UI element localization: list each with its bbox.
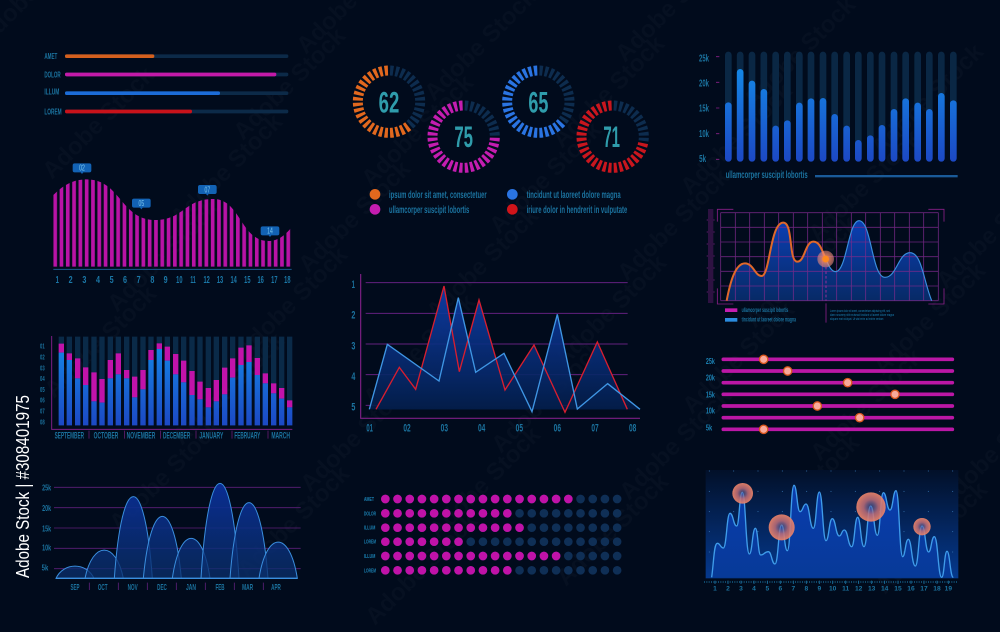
x axis: 5 (110, 275, 114, 286)
chart legend: ullamcorper suscipit lobortis (742, 308, 789, 314)
bar tracks (728, 55, 953, 158)
y axis labels: 3 (351, 340, 355, 352)
stock watermark: Adobe Stock (423, 421, 546, 544)
row labels: ILLUM (364, 554, 376, 560)
grid (721, 213, 938, 301)
y axis labels: 20k (706, 374, 715, 383)
month labels: DECEMBER (163, 430, 191, 440)
stock watermark: Adobe Stock (360, 507, 483, 630)
x axis: 10 (176, 275, 183, 286)
chart legend (725, 308, 796, 323)
x axis labels: 02 (403, 422, 411, 434)
y axis labels: 04 (40, 374, 45, 383)
panel: crossing line chart (351, 274, 640, 434)
callout: 07: 07 (204, 185, 211, 194)
y axis labels: 4 (351, 371, 356, 383)
stock watermark: Adobe Stock (866, 38, 989, 161)
gauge: 75 magenta: 75 (454, 121, 473, 154)
x axis: 2 (69, 275, 73, 286)
legend: ullamcorper suscipit lobortis (389, 205, 470, 216)
row labels: LOREM (364, 540, 376, 546)
row labels: AMET (364, 497, 374, 503)
callout: 05 (132, 199, 151, 209)
y axis labels: 5k (706, 423, 713, 432)
y axis labels: 25k (42, 483, 51, 493)
month labels: MAR (242, 582, 254, 592)
y axis labels: 07 (40, 407, 45, 416)
x axis labels: 9 (817, 586, 821, 593)
progress bar: lorem (44, 107, 288, 117)
panel: overlapping arc chart (42, 483, 301, 592)
progress bar: lorem: LOREM (44, 107, 62, 117)
chart background (706, 470, 958, 578)
x axis labels: 15 (894, 586, 902, 593)
stock watermark: Adobe Stock (551, 468, 674, 591)
axes (361, 274, 640, 418)
month labels: APR (271, 582, 281, 592)
note text: Lorem ipsum dolor sit amet, consectetuer adipiscing elit, sed (830, 309, 890, 313)
orange curve (727, 223, 826, 301)
x axis: 6 (123, 275, 127, 286)
callout: 07 (198, 185, 217, 196)
progress bar: dolor: DOLOR (44, 70, 61, 80)
y axis labels: 20k (699, 79, 709, 90)
stock watermark: Adobe Stock (677, 296, 800, 419)
x axis: 17 (271, 275, 278, 286)
callout: 05: 05 (138, 199, 145, 208)
bar tracks (59, 337, 292, 425)
row labels: ILLUM (364, 526, 376, 532)
filled dots (385, 499, 569, 570)
filled areas (369, 286, 640, 412)
month labels (55, 430, 290, 440)
legend: iriure dolor in hendrerit in vulputate (527, 205, 628, 216)
callout: 14: 14 (267, 227, 273, 236)
x axis labels: 3 (739, 586, 743, 593)
x axis: 14 (230, 275, 237, 286)
panel: progress bars (44, 51, 288, 117)
arcs (56, 483, 297, 578)
y axis labels: 15k (42, 523, 51, 533)
gauge: 62 orange (357, 69, 421, 134)
month labels: NOVEMBER (127, 430, 156, 440)
month labels: JAN (186, 582, 196, 592)
stock watermark: Adobe Stock (868, 257, 991, 380)
panel: slider chart (706, 355, 952, 433)
x axis labels: 04 (478, 422, 486, 434)
x axis labels: 13 (868, 586, 876, 593)
empty dots (385, 499, 617, 570)
stock watermark: Adobe Stock (742, 429, 865, 552)
legend (370, 189, 628, 216)
stock watermark: Adobe Stock (232, 460, 355, 583)
stock watermark: Adobe Stock (358, 288, 481, 411)
panel: grid area chart (707, 209, 944, 323)
stock watermark: Adobe Stock (230, 241, 353, 364)
y axis labels: 5k (699, 154, 706, 165)
callout: 02 (73, 163, 91, 174)
stock watermark: Adobe Stock (293, 155, 416, 278)
vertical stock id text: Adobe Stock | #308401975 (13, 395, 33, 578)
x axis labels: 4 (752, 586, 756, 593)
x axis labels: 08 (629, 422, 636, 434)
x axis labels: 06 (554, 422, 561, 434)
callout: 14 (261, 226, 279, 237)
panel: magenta striped area chart (53, 163, 292, 286)
slider handles (759, 355, 899, 433)
x axis labels: 03 (441, 422, 448, 434)
stock watermark: Adobe Stock (740, 210, 863, 333)
y axis labels (40, 342, 45, 426)
x axis labels: 17 (920, 586, 928, 593)
panel: stacked bar chart (40, 336, 292, 440)
x axis labels: 5 (765, 586, 769, 593)
x axis labels: 2 (726, 586, 730, 593)
x axis: 7 (137, 275, 141, 286)
progress bar: amet (44, 51, 288, 61)
gauge: 71 red (580, 104, 645, 169)
stock watermark: Adobe Stock (486, 335, 609, 458)
x axis labels (366, 422, 636, 434)
month labels: OCTOBER (94, 430, 119, 440)
progress bar: illum: ILLUM (44, 87, 59, 97)
month labels (70, 582, 281, 592)
x axis labels: 01 (366, 422, 373, 434)
stock watermark: Adobe Stock (37, 61, 160, 184)
stock watermark: Adobe Stock (421, 202, 544, 325)
gauge: 62 orange: 62 (379, 86, 399, 119)
y axis labels: 25k (706, 357, 715, 366)
stock watermark: Adobe Stock (102, 194, 225, 317)
y axis labels: 10k (706, 407, 715, 416)
x axis labels: 18 (933, 586, 941, 593)
stock watermark: Adobe Stock (675, 77, 798, 200)
x axis: 1 (56, 275, 59, 286)
stock watermark: Adobe Stock (165, 108, 288, 231)
bar values (728, 72, 953, 158)
x axis ruler (704, 581, 958, 584)
y axis labels: 03 (40, 363, 45, 372)
y axis labels: 01 (40, 342, 45, 351)
marker (817, 251, 834, 301)
panel: rounded bar chart (699, 53, 958, 181)
callout: 02: 02 (79, 164, 85, 173)
background dots (709, 471, 957, 552)
gauge: 71 red: 71 (603, 121, 620, 154)
x axis labels: 10 (829, 586, 837, 593)
y axis labels (706, 357, 715, 432)
grid lines (366, 283, 628, 405)
y axis labels (351, 279, 356, 414)
y axis labels: 1 (352, 279, 355, 291)
axes (52, 336, 292, 429)
area fill (727, 221, 932, 301)
x axis: 9 (164, 275, 168, 286)
note text: aliquam erat volutpat. Ut wisi enim ad minim veniam (830, 317, 883, 321)
month labels: NOV (128, 582, 138, 592)
month labels: DEC (157, 582, 167, 592)
slider tracks (723, 359, 952, 429)
panel: dot matrix (364, 497, 617, 574)
x axis: 3 (82, 275, 87, 286)
y axis labels: 02 (40, 352, 45, 361)
month labels: SEPTEMBER (55, 430, 84, 440)
striped area (53, 179, 292, 267)
stock watermark: Adobe Stock (104, 413, 227, 536)
panel: wave chart with highlights (704, 470, 958, 593)
caption and rule: ullamcorper suscipit lobortis (726, 170, 808, 181)
y axis labels: 25k (699, 53, 709, 64)
x axis: 4 (96, 275, 100, 286)
x axis: 11 (190, 275, 196, 286)
row labels: DOLOR (364, 511, 376, 517)
progress bar: amet: AMET (44, 51, 57, 61)
y axis labels: 15k (706, 390, 715, 399)
month labels: FEB (215, 582, 224, 592)
y axis labels (699, 53, 719, 165)
x axis labels: 07 (591, 422, 599, 434)
gauge: 65 blue (506, 69, 571, 134)
x axis labels: 1 (713, 586, 717, 593)
x axis: 16 (257, 275, 264, 286)
y axis labels: 20k (42, 503, 51, 513)
blue line (369, 298, 640, 412)
x axis: 18 (284, 275, 291, 286)
row labels (364, 497, 376, 574)
y axis labels: 08 (40, 417, 45, 426)
month labels: MARCH (271, 430, 290, 440)
gauge: 65 blue: 65 (528, 86, 548, 119)
stock watermark: Adobe Stock (805, 343, 928, 466)
stock watermark: Adobe Stock (870, 476, 993, 599)
month labels: FEBRUARY (234, 430, 260, 440)
chart legend: tincidunt ut laoreet dolore magna (742, 317, 796, 323)
magenta segments (59, 343, 292, 407)
x axis labels: 12 (855, 586, 863, 593)
x axis: 15 (244, 275, 251, 286)
stock watermark: Adobe Stock (39, 280, 162, 403)
y axis labels: 06 (40, 396, 45, 405)
y axis labels (42, 483, 51, 572)
highlight bubbles (732, 483, 931, 540)
blue curve (826, 221, 932, 301)
legend: tincidunt ut laoreet dolore magna (527, 190, 621, 201)
x axis (53, 269, 292, 286)
month labels: SEP (70, 582, 80, 592)
stock watermark: Adobe Stock (614, 382, 737, 505)
blue segments (59, 349, 292, 425)
grid lines (54, 487, 301, 569)
row labels: LOREM (364, 568, 376, 574)
gauge: 75 magenta (431, 104, 496, 169)
stock watermark: Adobe Stock (547, 30, 670, 153)
x axis labels: 7 (791, 586, 795, 593)
x axis: 8 (150, 275, 155, 286)
x axis: 12 (203, 275, 210, 286)
progress bar: dolor (44, 70, 288, 80)
y axis labels: 15k (699, 104, 709, 115)
stock watermark: Adobe Stock (803, 124, 926, 247)
x axis labels: 19 (945, 586, 952, 593)
x axis labels: 8 (804, 586, 808, 593)
y axis labels: 5 (351, 402, 355, 414)
note text (826, 303, 894, 323)
y axis labels: 05 (40, 385, 45, 394)
month labels: JANUARY (199, 430, 223, 440)
stock watermark: Adobe Stock (612, 163, 735, 286)
x axis labels: 14 (881, 586, 889, 593)
corner brackets (717, 209, 944, 304)
y axis labels: 10k (699, 129, 709, 140)
note text: diam nonummy nibh euismod tincidunt ut laoreet dolore magna (830, 313, 894, 317)
y axis labels: 10k (42, 543, 51, 553)
x axis labels: 05 (516, 422, 523, 434)
x axis: 13 (217, 275, 223, 286)
progress bar: illum (44, 87, 288, 97)
stock watermark: Adobe Stock (549, 249, 672, 372)
stock watermark: Adobe Stock (484, 116, 607, 239)
x axis labels: 6 (778, 586, 782, 593)
wave curve (712, 485, 953, 577)
y axis labels: 5k (42, 562, 48, 572)
stock watermark: Adobe Stock (295, 374, 418, 497)
panel: donut gauges (357, 69, 645, 216)
left scale ticks (707, 210, 715, 302)
red line (376, 286, 627, 412)
stock watermark: Adobe Stock (228, 22, 351, 145)
legend: ipsum dolor sit amet, consectetuer (389, 190, 487, 201)
x axis labels: 11 (842, 586, 849, 593)
x axis labels (713, 586, 952, 593)
x axis labels: 16 (907, 586, 915, 593)
stock watermark: Adobe Stock (356, 69, 479, 192)
month labels: OCT (98, 582, 108, 592)
stock watermark: Adobe Stock (167, 327, 290, 450)
y axis labels: 2 (351, 310, 355, 322)
